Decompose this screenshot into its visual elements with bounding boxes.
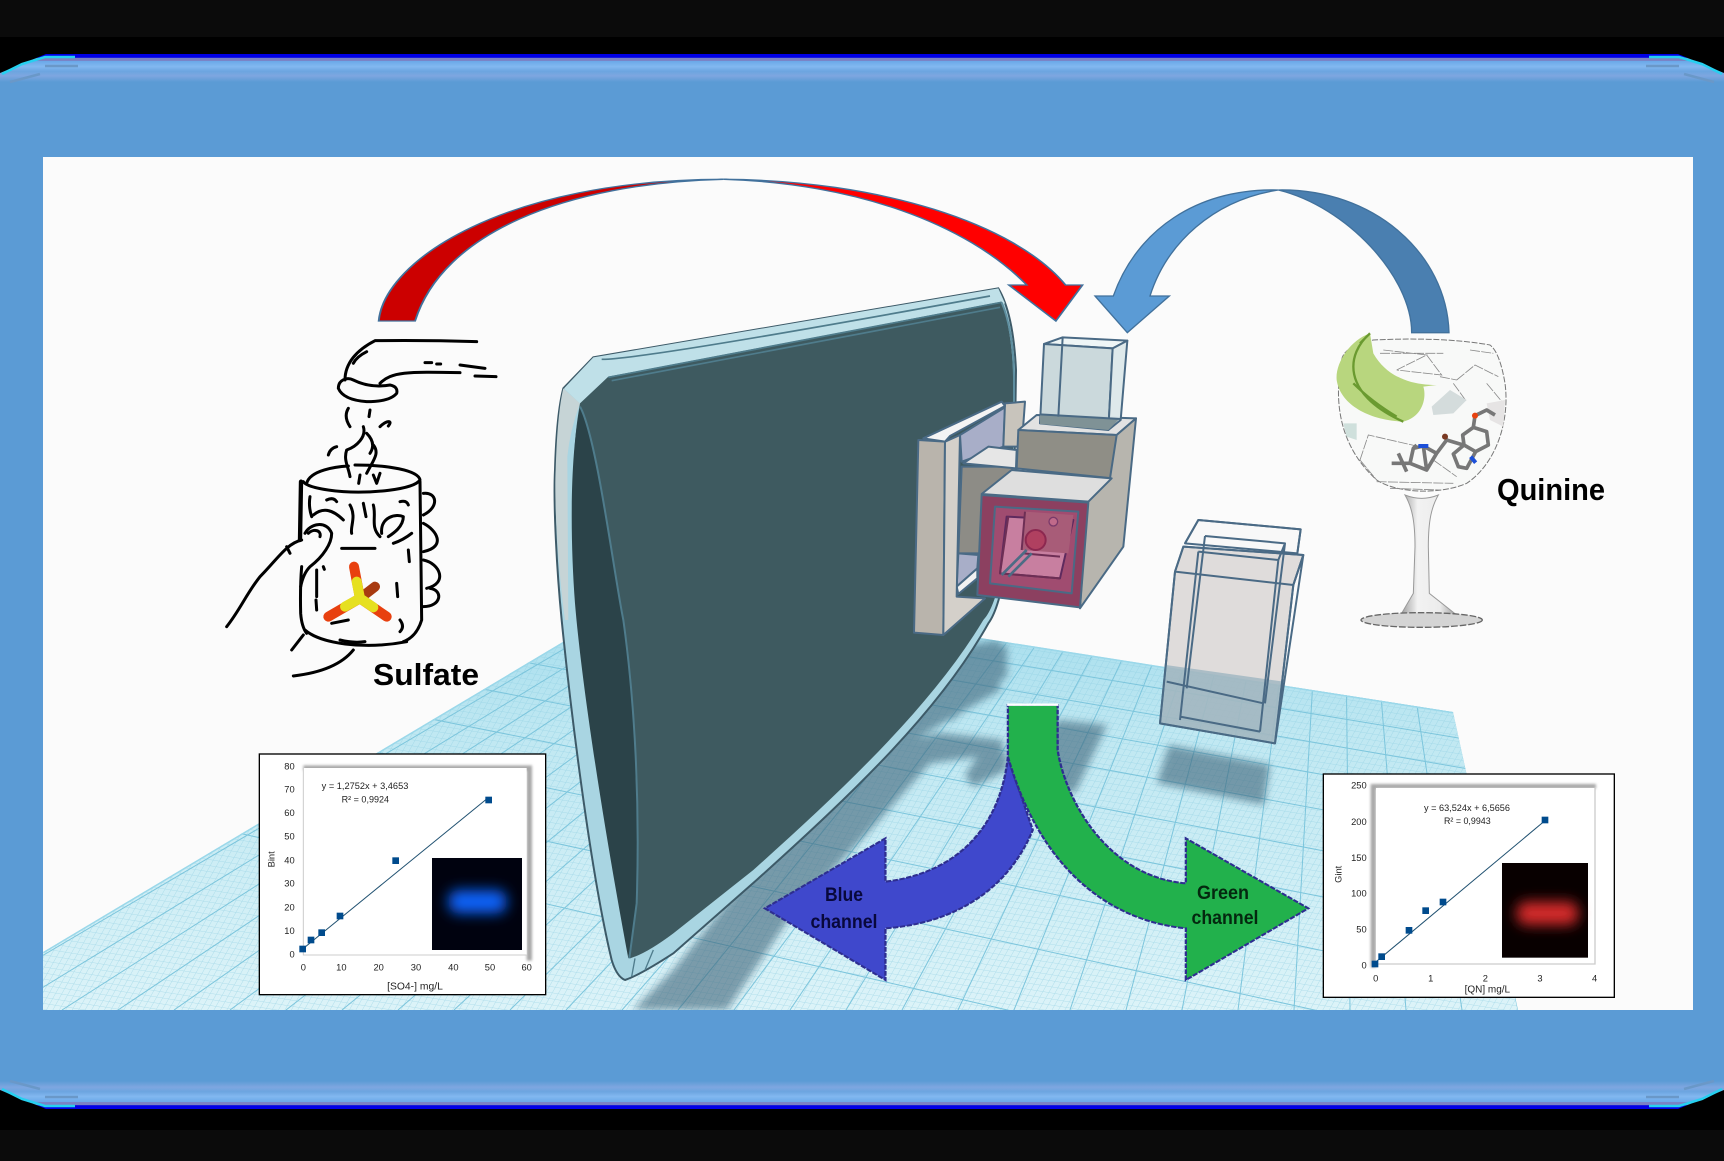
chart: blue intensity vs sulfate calibration [259, 754, 546, 995]
quinine molecule [1392, 410, 1495, 472]
chart: green intensity vs quinine calibration [1323, 774, 1614, 997]
x axis labels: 1 [1428, 974, 1433, 984]
x axis labels: 3 [1537, 974, 1543, 984]
label: Green channel [1192, 883, 1258, 929]
output arrows: blue and green channels [765, 705, 1308, 980]
trendline equation: y = 63,524x + 6,5656 [1424, 803, 1510, 813]
y axis labels: 50 [284, 832, 295, 842]
plot area [303, 765, 532, 961]
y axis labels: 50 [1356, 925, 1367, 935]
y axis labels: 100 [1351, 889, 1367, 899]
label: Green channel: Green [1197, 883, 1249, 904]
x axis title: [SO4-] mg/L [387, 981, 443, 992]
glass stem [1401, 495, 1457, 615]
inset: red fluorescence image [1502, 863, 1588, 958]
x axis labels [1373, 974, 1597, 984]
y axis labels: 70 [284, 785, 295, 795]
x axis labels: 10 [336, 963, 347, 973]
data points [299, 797, 492, 952]
label: Sulfate: Sulfate [373, 657, 479, 692]
data points [1372, 817, 1548, 967]
icon: faucet filling mug held in hand, with sulfate molecule [227, 340, 496, 676]
y axis labels: 250 [1351, 780, 1367, 790]
glass bowl [1338, 339, 1506, 491]
x axis labels: 2 [1483, 974, 1488, 984]
label: Blue channel [810, 885, 878, 933]
y axis labels: 60 [284, 808, 295, 818]
ice and glass lines [1360, 350, 1503, 490]
floor shadows [633, 640, 1270, 1010]
x axis labels: 60 [521, 963, 532, 973]
left bracket [914, 402, 1025, 635]
blue channel arrow [765, 757, 1033, 980]
empty cuvette on the right [1160, 520, 1303, 743]
trendline equation: R² = 0,9943 [1444, 816, 1491, 826]
x axis labels [301, 963, 532, 973]
main body [982, 415, 1136, 608]
label: Quinine: Quinine [1497, 472, 1605, 507]
sulfate molecule [328, 567, 387, 617]
y axis labels: 30 [284, 879, 295, 889]
y axis labels: 20 [284, 902, 295, 912]
y axis labels: 0 [1361, 960, 1367, 970]
blue curved arrow: quinine into device [1095, 190, 1449, 333]
device: detector housing and cuvette holder [914, 337, 1136, 635]
trendline [303, 797, 489, 949]
x axis labels: 4 [1592, 974, 1597, 984]
white central panel [43, 157, 1693, 1010]
x axis labels: 0 [1373, 974, 1378, 984]
label: Blue channel: Blue [825, 885, 863, 906]
y axis title: Gint [1333, 865, 1343, 883]
label: Green channel: channel [1192, 908, 1258, 929]
lime slice [1337, 333, 1437, 422]
y axis labels: 200 [1351, 817, 1367, 827]
label: Blue channel: channel [810, 912, 878, 933]
x axis title: [QN] mg/L [1465, 985, 1511, 996]
x axis labels: 40 [448, 963, 459, 973]
trendline equation: y = 1,2752x + 3,4653 [322, 781, 408, 791]
y axis title: Bint [267, 851, 277, 867]
x axis labels: 0 [301, 963, 306, 973]
large curved display screen [555, 288, 1016, 980]
x axis labels: 30 [411, 963, 421, 973]
y axis labels: 0 [289, 950, 295, 960]
trendline equation [322, 781, 408, 804]
trendline [1375, 821, 1545, 963]
x axis labels: 50 [485, 963, 495, 973]
trendline equation: R² = 0,9924 [342, 794, 389, 804]
x axis labels: 20 [373, 963, 384, 973]
y axis labels [1351, 780, 1367, 970]
red curved arrow: sulfate into device [379, 179, 1083, 321]
inset: blue fluorescence image [432, 858, 522, 950]
top sample cuvette [1040, 337, 1127, 430]
y axis labels [284, 761, 295, 960]
plot area [1371, 784, 1596, 967]
icon: gin glass with lime and quinine molecule [1337, 333, 1506, 627]
magenta front face with LED [977, 495, 1088, 607]
y axis labels: 10 [284, 926, 295, 936]
green channel arrow [1008, 705, 1308, 980]
y axis labels: 80 [284, 761, 295, 771]
glass foot [1361, 613, 1482, 627]
trendline equation [1424, 803, 1510, 826]
y axis labels: 40 [284, 855, 295, 865]
workplane grid floor [43, 638, 1518, 1010]
y axis labels: 150 [1351, 853, 1367, 863]
